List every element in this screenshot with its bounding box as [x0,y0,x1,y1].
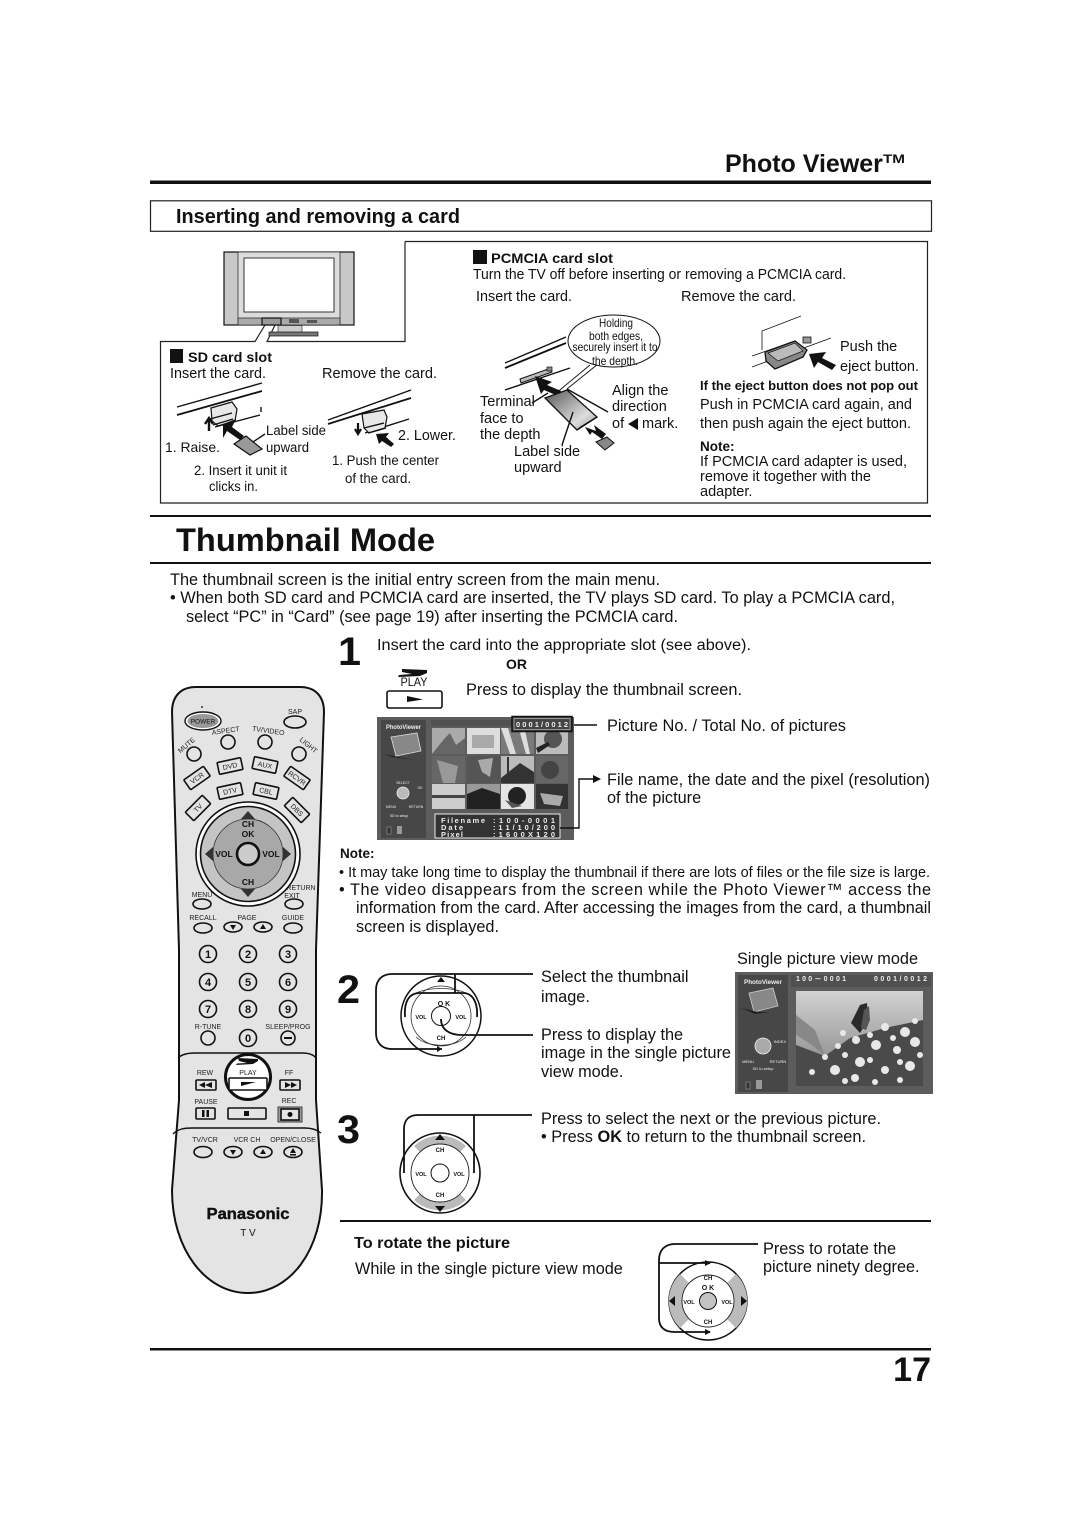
SD step labels: 2. Lower. [398,428,456,444]
step 1 instruction [377,637,751,699]
PCMCIA card slot heading: Remove the card. [681,289,796,305]
PCMCIA eject notes: Push in PCMCIA card again, and [700,397,912,413]
VCR buttons: OPEN/CLOSE [270,1137,316,1144]
note text: Note: [340,846,374,861]
step number 2: 2 [337,968,360,1012]
source buttons [184,757,310,823]
SD step labels: clicks in. [209,479,258,494]
step number 3: 3 [337,1108,360,1152]
screen: single picture view: RETURN [770,1059,786,1064]
PCMCIA insert labels: Label side [514,444,580,460]
number keys: 8 [245,1004,251,1016]
step 2 instruction: Press to display the [541,1026,683,1044]
callout: holding both edges [555,315,660,394]
rotate heading and text: picture ninety degree. [763,1258,920,1276]
VCR buttons: VCR CH [234,1137,260,1144]
source buttons: CBL [258,787,273,797]
PCMCIA eject notes: If PCMCIA card adapter is used, [700,454,907,470]
Panasonic logo [206,1206,290,1239]
navigation dial: VOL [215,849,233,859]
note text: screen is displayed. [356,918,499,936]
PCMCIA insert labels: Terminal [480,394,535,410]
SD step labels: 1. Push the center [332,453,439,468]
transport buttons: REW [197,1070,214,1077]
intro text: select “PC” in “Card” (see page 19) after inserting the PCMCIA card. [186,608,678,626]
rotate heading and text: To rotate the picture [354,1235,510,1252]
SD step labels: upward [266,440,309,455]
screen: thumbnail view [377,716,574,840]
menu labels behind dial: MENU [192,892,212,899]
remote control [172,687,324,1293]
SD step labels [165,423,456,494]
intro text: • When both SD card and PCMCIA card are inserted, the TV plays SD card. To play a PCMCIA card, [170,589,895,607]
source buttons: AUX [257,761,273,771]
dial diagram: rotate: VOL [721,1300,733,1306]
top buttons: LIGHT [298,737,319,756]
navigation dial: VOL [262,849,280,859]
step 3 [337,1108,881,1213]
screen: thumbnail view: OK [417,786,423,790]
note text [339,846,931,936]
PCMCIA insert labels: face to [480,411,524,427]
SD step labels: Label side [266,423,326,438]
file info box: : 1 0 0 - 0 0 0 1 [493,816,555,825]
PCMCIA card slot heading: Insert the card. [476,289,572,305]
rotate heading and text: While in the single picture view mode [355,1260,623,1278]
menu labels behind dial [192,885,316,900]
note text: • The video disappears from the screen while the Photo Viewer™ access the [339,881,931,899]
dial diagram: select thumbnail: VOL [455,1015,467,1021]
dial diagram: select thumbnail: O K [438,1001,450,1008]
navigation dial: OK [242,829,255,839]
dial diagram: rotate: O K [702,1285,714,1292]
file info box: : 1 6 0 0 X 1 2 0 [493,830,555,839]
menu buttons: RECALL [189,915,217,922]
source buttons: DBS [289,803,304,819]
icon: television [224,252,354,336]
PCMCIA eject notes [700,339,919,500]
step 2 [337,950,933,1094]
section heading: Inserting and removing a card: Inserting and removing a card [176,206,460,228]
number keys: 5 [245,977,251,989]
source buttons: TV [193,803,205,814]
SD step labels: 2. Insert it unit it [194,463,287,478]
screen: single picture view: SD to setup [753,1066,774,1071]
number keys: 4 [205,977,212,989]
step 3 instruction: • Press OK to return to the thumbnail screen. [541,1128,866,1146]
PCMCIA card slot heading [473,250,846,305]
number keys: 0 [245,1033,251,1045]
rotate heading and text: Press to rotate the [763,1240,896,1258]
screen: thumbnail view: MENU [386,805,397,809]
R-TUNE and SLEEP labels [195,1024,311,1031]
number keys [200,946,296,1046]
remote body [172,687,324,1293]
top buttons: ASPECT [211,726,241,737]
file info box [435,814,560,839]
VCR buttons: TV/VCR [192,1137,218,1144]
callout: holding both edges: Holding [599,316,633,330]
PCMCIA eject notes: adapter. [700,484,752,500]
number keys: 3 [285,949,291,961]
screen: single picture view: Single picture view mode [737,950,918,968]
dial diagram: select thumbnail: VOL [415,1015,427,1021]
header: Photo Viewer [150,150,931,184]
step number 1: 1 [338,630,361,674]
navigation dial [196,802,300,906]
PCMCIA eject notes: then push again the eject button. [700,416,911,432]
screen: thumbnail view: SD to setup [390,814,408,818]
note text: information from the card. After accessing the images from the card, a thumbnail [356,899,931,917]
transport buttons: PLAY [239,1070,257,1077]
top buttons [177,706,319,761]
screen: thumbnail view: RETURN [409,805,424,809]
screen: single picture view: 100－0001 [796,976,846,983]
dial diagram: next or previous: CH [436,1193,444,1199]
screen: single picture view: PhotoViewer [744,979,782,986]
SD step labels: 1. Raise. [165,439,220,455]
intro text: The thumbnail screen is the initial entry screen from the main menu. [170,571,660,589]
illustration: PCMCIA eject [752,316,836,370]
step 3 instruction: Press to select the next or the previous picture. [541,1110,881,1128]
source buttons: RCVR [286,770,307,787]
menu buttons: GUIDE [282,915,304,922]
file info box: Date [441,823,463,832]
step 2 instruction: image in the single picture [541,1044,731,1062]
file info box: Filename [441,816,485,825]
dial diagram: next or previous: CH [436,1148,444,1154]
header: Photo Viewer: TM [883,154,905,166]
step 1 instruction: Press to display the thumbnail screen. [466,681,742,699]
note text: • It may take long time to display the thumbnail if there are lots of files or the file size is large. [339,864,930,881]
picture number box: 0001/0012 [516,720,568,729]
dial diagram: next or previous [400,1115,532,1213]
dial diagram: select thumbnail: CH [437,1036,445,1042]
file info box: Pixel [441,830,463,839]
SD insert and remove labels [170,366,437,382]
picture number box [512,716,572,732]
top buttons: TV/VIDEO [252,726,285,737]
SD insert and remove labels: Remove the card. [322,366,437,382]
screen: single picture view: MENU [742,1059,754,1064]
transport buttons: PAUSE [194,1099,218,1106]
icon: SD PLAY button: PLAY [400,677,428,689]
PCMCIA eject notes: remove it together with the [700,469,871,485]
callout: file name [560,771,930,828]
step 2 instruction: view mode. [541,1063,623,1081]
PCMCIA eject notes: eject button. [840,359,919,375]
menu labels behind dial: RETURN [286,885,316,892]
dial diagram: rotate: CH [704,1320,712,1326]
screen: single picture view: 0001/0012 [874,976,927,983]
step 1 instruction: OR [506,656,527,672]
callout: holding both edges: securely insert it to [572,340,658,354]
PCMCIA card slot heading: Turn the TV off before inserting or removing a PCMCIA card. [473,267,846,283]
dial diagram: rotate: VOL [683,1300,695,1306]
PCMCIA eject notes: Push the [840,339,897,355]
PCMCIA card slot heading: PCMCIA card slot [491,251,614,266]
callout: picture number: Picture No. / Total No. of pictures [607,717,846,735]
intro text [170,571,895,626]
dial diagram: rotate: CH [704,1276,712,1282]
section: to rotate the picture [340,1220,931,1340]
dial diagram: select thumbnail [376,974,533,1056]
section heading: Inserting and removing a card [150,201,932,231]
PCMCIA insert labels: Align the [612,383,668,399]
number keys: 9 [285,1004,291,1016]
step 1 [338,630,930,840]
dial diagram: next or previous: VOL [453,1172,465,1178]
illustration: removing SD card [328,390,411,447]
header: Photo Viewer: Photo Viewer [725,150,883,178]
step 2 instruction: Select the thumbnail [541,968,689,986]
SD step labels: of the card. [345,471,411,486]
PCMCIA insert labels: direction [612,399,667,415]
screen: single picture view: INDEX [774,1039,786,1044]
menu labels behind dial: EXIT [284,893,301,900]
number keys: 1 [205,949,211,961]
menu buttons [189,899,304,933]
callout: file name: File name, the date and the pixel (resolution) [607,771,930,789]
navigation dial: CH [242,877,254,887]
PCMCIA insert labels: the depth [480,427,540,443]
menu buttons: PAGE [238,915,257,922]
dial diagram: next or previous: VOL [415,1172,427,1178]
PCMCIA eject notes: If the eject button does not pop out [700,378,919,393]
Panasonic logo: T V [240,1228,256,1239]
heading: Thumbnail Mode: Thumbnail Mode [176,521,435,558]
callout: holding both edges: the depth. [592,354,638,368]
step 1 instruction: Insert the card into the appropriate slot (see above). [377,637,751,654]
number keys: 2 [245,949,251,961]
file info box: : 1 1 / 1 0 / 2 0 0 [493,823,555,832]
step 2 instruction: image. [541,988,590,1006]
icon: SD PLAY button [387,669,442,708]
source buttons: DVD [222,762,238,772]
navigation dial: CH [242,819,254,829]
R-TUNE and SLEEP labels: R-TUNE [195,1024,222,1031]
dial diagram: rotate [659,1244,758,1340]
source buttons: DTV [223,787,238,797]
PCMCIA insert labels: of [612,416,625,432]
PCMCIA eject notes: Note: [700,439,734,454]
illustration: inserting SD card [177,383,265,455]
top buttons: MUTE [177,737,197,755]
R-TUNE and SLEEP labels: SLEEP/PROG [265,1024,311,1031]
SD insert and remove labels: Insert the card. [170,366,266,382]
illustration: inserting PCMCIA card [505,337,614,450]
transport buttons [173,1053,321,1134]
top buttons: SAP [288,709,302,716]
number keys: 6 [285,977,291,989]
step 2 instruction [541,968,731,1081]
SD card slot heading: SD card slot [188,350,273,365]
rotate heading and text [354,1235,920,1278]
screen: thumbnail view: SELECT [396,781,411,785]
transport buttons: FF [285,1070,293,1077]
panel: card slot instructions [160,242,928,503]
transport buttons: REC [282,1098,296,1105]
thumbnail grid [432,728,568,809]
footer: page number: 17 [893,1351,931,1389]
Panasonic logo: Panasonic [206,1206,290,1223]
top buttons: POWER [191,718,216,726]
PCMCIA insert labels [480,383,678,476]
VCR buttons [192,1137,316,1158]
callout: file name: of the picture [607,789,701,807]
screen: single picture view [735,950,933,1094]
source buttons: VCR [190,772,206,786]
photo of butterfly [796,991,923,1086]
screen: thumbnail view: PhotoViewer [386,725,422,731]
step 3 instruction [541,1110,881,1146]
PCMCIA insert labels: upward [514,460,562,476]
number keys: 7 [205,1004,211,1016]
PCMCIA insert labels: mark. [642,416,678,432]
panel outline [160,242,928,503]
callout: holding both edges: both edges, [589,329,643,343]
